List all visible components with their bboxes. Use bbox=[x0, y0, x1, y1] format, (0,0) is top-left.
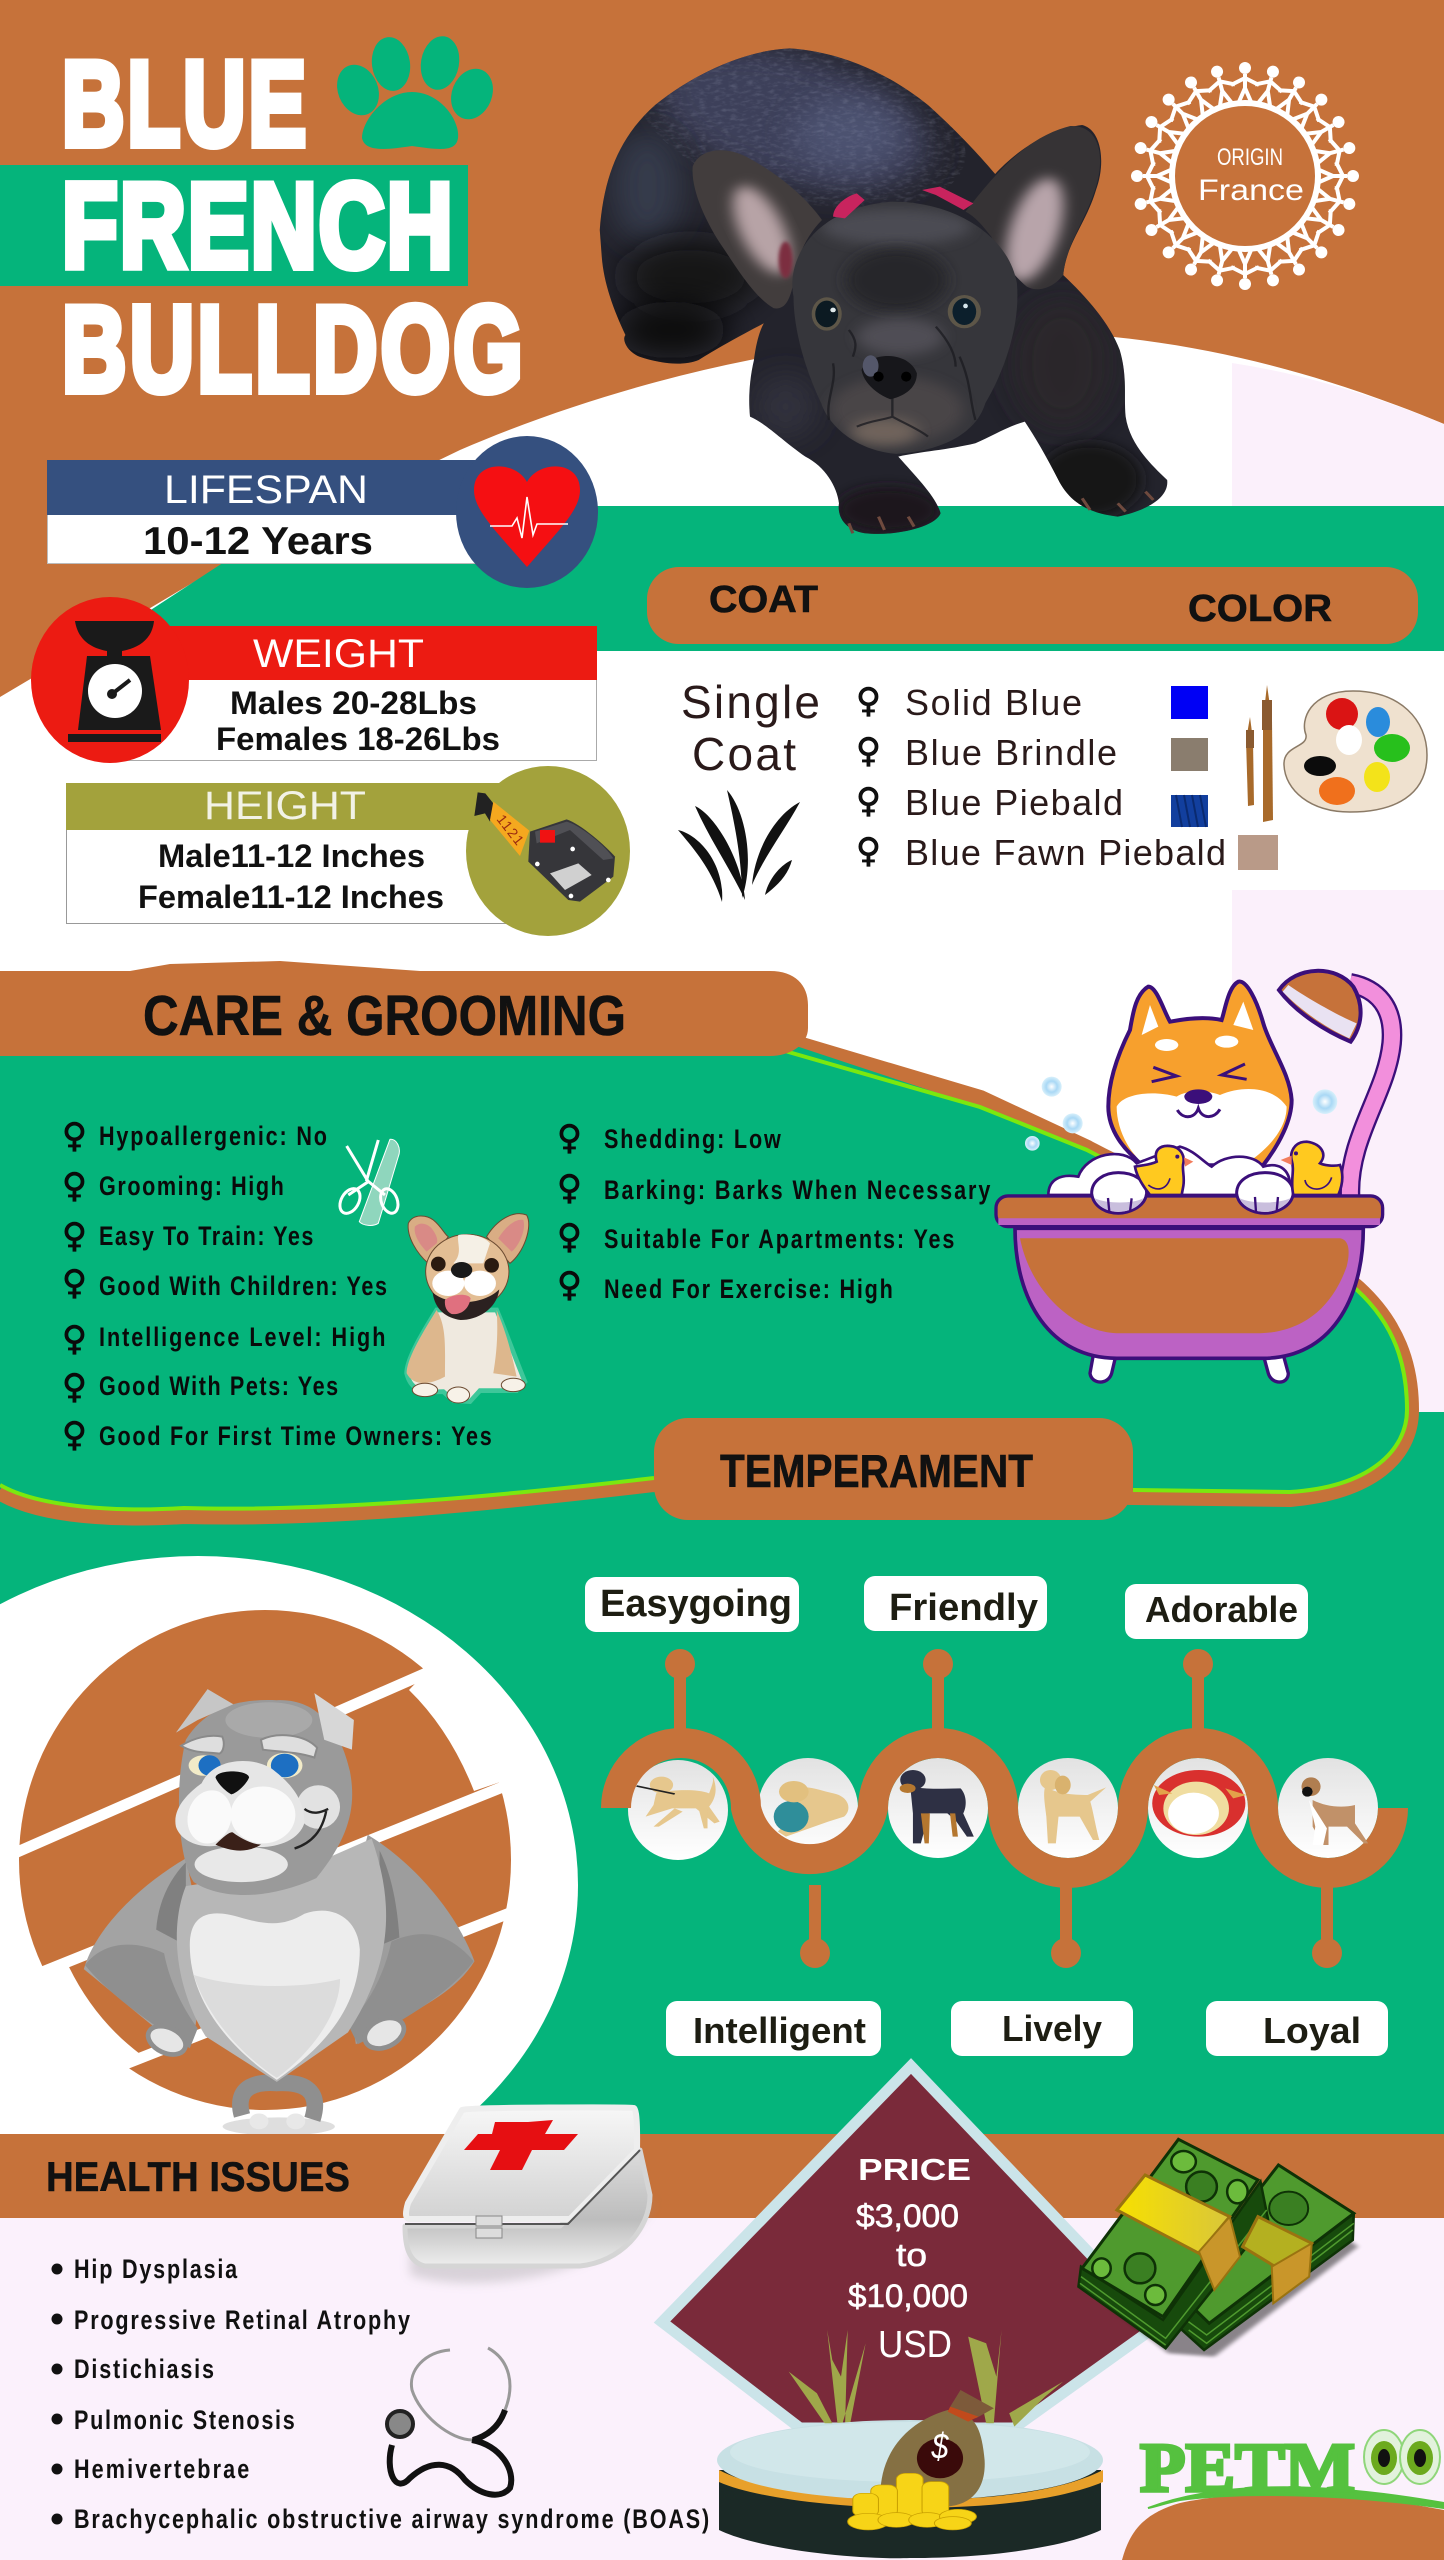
illustration: shiba in bathtub bbox=[996, 971, 1392, 1382]
icon: stethoscope bbox=[387, 2348, 511, 2495]
panel: height bbox=[66, 766, 630, 936]
tub body bbox=[1015, 1228, 1363, 1358]
smile bbox=[295, 1809, 328, 1849]
left arm bbox=[84, 1858, 206, 2048]
care section lime line bbox=[0, 1049, 1407, 1509]
row easy to train: Easy To Train: Yes bbox=[99, 1222, 313, 1252]
bottom pink panel bbox=[0, 2218, 1444, 2560]
background: pink hill column bbox=[1232, 363, 1444, 506]
weight males: Males 20-28Lbs bbox=[230, 685, 477, 721]
tag friendly bbox=[864, 1576, 1047, 1631]
platform bbox=[717, 2420, 1103, 2558]
shadow bbox=[223, 2117, 335, 2136]
tag lively bbox=[951, 2001, 1133, 2056]
row hypoallergenic bbox=[62, 1116, 327, 1156]
row good with children bbox=[62, 1263, 387, 1303]
heading: health issues: HEALTH ISSUES bbox=[46, 2153, 350, 2200]
single coat text bbox=[681, 676, 820, 780]
brows bbox=[181, 1735, 317, 1758]
copper corner bbox=[1122, 2494, 1444, 2560]
forehead shade bbox=[225, 1702, 312, 1738]
care list left bbox=[62, 1116, 492, 1455]
row barking: ♀ bbox=[557, 1168, 582, 1208]
eyes bbox=[189, 1753, 302, 1778]
dollar disc bbox=[917, 2438, 963, 2478]
price low: $3,000 bbox=[856, 2198, 959, 2234]
icon: grass coat bbox=[678, 790, 800, 902]
icon: stacks of cash bbox=[1078, 2139, 1358, 2357]
chin bbox=[195, 1847, 288, 1882]
weight header bbox=[120, 626, 597, 680]
logo: petmoo bbox=[1122, 2430, 1444, 2560]
height female: Female11-12 Inches bbox=[138, 879, 444, 915]
row intelligence: Intelligence Level: High bbox=[99, 1323, 385, 1353]
single coat text: Single bbox=[681, 676, 820, 728]
tag adorable bbox=[1125, 1584, 1308, 1639]
item hip dysplasia: Hip Dysplasia bbox=[74, 2255, 238, 2285]
temperament heading: TEMPERAMENT bbox=[720, 1445, 1033, 1497]
cheek smile patch bbox=[297, 1785, 340, 1829]
row good with pets: Good With Pets: Yes bbox=[99, 1372, 338, 1402]
thumb standing lab bbox=[1040, 1770, 1106, 1843]
row grooming: ♀ bbox=[62, 1166, 87, 1206]
dollar sign: $ bbox=[931, 2427, 950, 2467]
row exercise: Need For Exercise: High bbox=[604, 1275, 893, 1305]
row apartments bbox=[557, 1217, 954, 1257]
white thumbnail circles bbox=[628, 1758, 1378, 1860]
icon: kitchen scale bbox=[68, 621, 161, 742]
temperament heading box bbox=[654, 1418, 1133, 1520]
icon: first aid kit bbox=[405, 2107, 655, 2283]
swatch piebald bbox=[1171, 795, 1208, 827]
icon: scissors and comb bbox=[336, 1139, 401, 1225]
icon: paint palette bbox=[1246, 685, 1427, 822]
title group bbox=[0, 37, 523, 417]
icon: money bag and coins bbox=[848, 2390, 994, 2530]
wave bbox=[616, 1743, 1393, 1873]
reeds around price platform bbox=[789, 2330, 1063, 2427]
row: solid blue: Solid Blue bbox=[905, 682, 1082, 723]
row good with children: Good With Children: Yes bbox=[99, 1272, 387, 1302]
price diamond bbox=[662, 2066, 1158, 2428]
shower pipe bbox=[1350, 983, 1392, 1195]
green title bar bbox=[0, 165, 468, 286]
row good with children: ♀ bbox=[62, 1263, 87, 1303]
right arm bbox=[340, 1835, 474, 2044]
item pra: Progressive Retinal Atrophy bbox=[74, 2306, 410, 2336]
tag easygoing: Easygoing bbox=[600, 1583, 792, 1625]
tag loyal: Loyal bbox=[1263, 2010, 1361, 2051]
origin label: ORIGIN bbox=[1217, 144, 1283, 171]
tub rim bbox=[996, 1196, 1383, 1227]
icon: tape measure bbox=[474, 792, 615, 902]
thumb rottweiler bbox=[900, 1770, 974, 1843]
tag friendly: Friendly bbox=[889, 1587, 1038, 1629]
heading coat: COAT bbox=[709, 579, 818, 621]
row: blue piebald: ♀ bbox=[856, 781, 881, 821]
row: solid blue: ♀ bbox=[856, 681, 881, 721]
background: pink column lower bbox=[1232, 890, 1444, 1415]
snout bbox=[175, 1761, 304, 1847]
row first time owners: Good For First Time Owners: Yes bbox=[99, 1422, 492, 1452]
price to: to bbox=[896, 2237, 927, 2273]
temperament wave connector bbox=[616, 1649, 1393, 1968]
care section green blob bbox=[0, 1040, 1407, 1509]
icon: heart with pulse bbox=[474, 466, 580, 567]
health issues band bbox=[0, 2134, 1444, 2218]
price heading: PRICE bbox=[858, 2152, 971, 2187]
height header bbox=[66, 783, 516, 830]
lifespan badge bbox=[456, 436, 598, 588]
rear paws bbox=[249, 2113, 305, 2129]
lifespan box bbox=[48, 460, 480, 564]
health issues list bbox=[52, 2255, 709, 2535]
row good with pets bbox=[62, 1367, 338, 1407]
tag intelligent bbox=[666, 2001, 881, 2056]
row grooming bbox=[62, 1166, 284, 1206]
heading: care and grooming: CARE & GROOMING bbox=[143, 984, 626, 1048]
care list right bbox=[557, 1118, 991, 1305]
row intelligence bbox=[62, 1319, 385, 1359]
tub feet bbox=[1090, 1355, 1288, 1382]
tag loyal bbox=[1206, 2001, 1388, 2056]
background: green band bbox=[88, 506, 1444, 651]
tag lively: Lively bbox=[1002, 2008, 1102, 2049]
height badge bbox=[466, 766, 630, 936]
nodes and stems bottom bbox=[800, 1885, 1342, 1968]
eyes bbox=[1364, 2430, 1440, 2484]
tag adorable: Adorable bbox=[1145, 1589, 1298, 1630]
item pulmonic stenosis: Pulmonic Stenosis bbox=[74, 2406, 295, 2436]
care and grooming ribbon bbox=[0, 961, 808, 1056]
bag bbox=[880, 2410, 985, 2507]
rubber ducks bbox=[1135, 1142, 1342, 1195]
thumb dog in basket bbox=[1152, 1770, 1246, 1837]
striped copper circle bbox=[15, 1610, 530, 2110]
swatch fawn bbox=[1238, 835, 1278, 870]
title: BULLDOG: BULLDOG bbox=[62, 280, 523, 417]
belly shade bbox=[194, 1975, 340, 2078]
wordmark: PETM bbox=[1140, 2430, 1355, 2507]
tie bbox=[950, 2390, 994, 2418]
muzzle lobes bbox=[182, 1785, 295, 1848]
lime swoosh bbox=[1148, 2487, 1444, 2508]
row: blue piebald: Blue Piebald bbox=[905, 782, 1123, 823]
height male: Male11-12 Inches bbox=[158, 838, 425, 874]
row barking: Barking: Barks When Necessary bbox=[604, 1176, 991, 1206]
care section border copper bbox=[0, 1040, 1409, 1515]
row: blue brindle: ♀ bbox=[856, 731, 881, 771]
duck left bbox=[1135, 1146, 1193, 1195]
coat color list bbox=[856, 681, 1278, 873]
icon: tape measure: 1121 bbox=[494, 811, 528, 849]
shiba head bbox=[1108, 982, 1292, 1165]
row hypoallergenic: Hypoallergenic: No bbox=[99, 1122, 327, 1152]
row exercise: ♀ bbox=[557, 1265, 582, 1305]
bubbles bbox=[1025, 1077, 1337, 1151]
ears bbox=[176, 1689, 354, 1750]
heading color: COLOR bbox=[1188, 588, 1332, 630]
background: white hill bbox=[0, 333, 1444, 975]
lifespan header bbox=[47, 460, 479, 515]
row easy to train: ♀ bbox=[62, 1216, 87, 1256]
illustration: grey bulldog mascot bbox=[84, 1689, 474, 2136]
row grooming: Grooming: High bbox=[99, 1172, 284, 1202]
origin value: France bbox=[1198, 174, 1304, 207]
title: BLUE: BLUE bbox=[62, 37, 306, 171]
shower head bbox=[1279, 971, 1361, 1042]
row: blue fawn piebald: ♀ bbox=[856, 831, 881, 871]
weight heading: WEIGHT bbox=[253, 632, 424, 676]
row first time owners: ♀ bbox=[62, 1415, 87, 1455]
belly bbox=[190, 1911, 360, 2080]
price currency: USD bbox=[878, 2324, 952, 2366]
item hemivertebrae: Hemivertebrae bbox=[74, 2455, 249, 2485]
white circle backdrop bbox=[0, 1556, 578, 2214]
duck right bbox=[1281, 1142, 1342, 1195]
mouth bbox=[215, 1832, 261, 1851]
swatch brindle bbox=[1171, 738, 1208, 771]
thumbnails: six dogs bbox=[637, 1770, 1368, 1845]
row easy to train bbox=[62, 1216, 313, 1256]
front paws bbox=[144, 2012, 409, 2060]
head bbox=[179, 1700, 352, 1895]
icon: sitting french bulldog cartoon bbox=[407, 1214, 529, 1403]
single coat text: Coat bbox=[692, 728, 796, 780]
row barking bbox=[557, 1168, 991, 1208]
lifespan value: 10-12 Years bbox=[143, 520, 373, 563]
coat color bar bbox=[647, 567, 1418, 644]
foam bbox=[1048, 1147, 1290, 1195]
row: blue fawn piebald: Blue Fawn Piebald bbox=[905, 832, 1226, 873]
weight box bbox=[120, 626, 596, 760]
row intelligence: ♀ bbox=[62, 1319, 87, 1359]
row hypoallergenic: ♀ bbox=[62, 1116, 87, 1156]
item distichiasis: Distichiasis bbox=[74, 2355, 214, 2385]
background: copper header bbox=[0, 0, 1444, 720]
thumb boxer bbox=[1302, 1777, 1368, 1845]
row exercise bbox=[557, 1265, 893, 1305]
paws bbox=[1092, 1173, 1293, 1213]
swatch solid blue bbox=[1171, 686, 1208, 719]
thumb running dog bbox=[637, 1777, 720, 1828]
coin piles bbox=[848, 2473, 976, 2530]
tail ring bbox=[240, 2083, 315, 2119]
ring of people bbox=[1131, 62, 1359, 290]
background: lower green field bbox=[0, 1412, 1444, 2137]
thumb dog with ball bbox=[774, 1781, 848, 1837]
row apartments: Suitable For Apartments: Yes bbox=[604, 1225, 954, 1255]
nodes and stems top bbox=[665, 1649, 1213, 1730]
weight badge bbox=[31, 597, 189, 763]
height heading: HEIGHT bbox=[204, 784, 366, 828]
row shedding bbox=[557, 1118, 782, 1158]
row first time owners bbox=[62, 1415, 492, 1455]
price text bbox=[848, 2152, 971, 2366]
row: blue brindle: Blue Brindle bbox=[905, 732, 1117, 773]
row good with pets: ♀ bbox=[62, 1367, 87, 1407]
icon: paw bbox=[330, 33, 500, 149]
row shedding: Shedding: Low bbox=[604, 1125, 782, 1155]
price high: $10,000 bbox=[848, 2278, 968, 2314]
nose bbox=[215, 1771, 249, 1794]
torso bbox=[177, 1839, 386, 2082]
photo: blue french bulldog bbox=[600, 19, 1167, 534]
band bbox=[948, 2407, 978, 2422]
item boas: Brachycephalic obstructive airway syndrome (BOAS) bbox=[74, 2505, 709, 2535]
tag easygoing bbox=[585, 1577, 799, 1632]
height box bbox=[66, 784, 516, 924]
title: FRENCH: FRENCH bbox=[62, 159, 453, 293]
lifespan heading: LIFESPAN bbox=[164, 468, 368, 512]
panel: weight bbox=[31, 597, 597, 763]
origin badge bbox=[1131, 62, 1359, 290]
tag intelligent: Intelligent bbox=[693, 2010, 866, 2051]
panel: coat and color header bbox=[647, 567, 1418, 644]
panel: lifespan bbox=[47, 436, 598, 588]
weight females: Females 18-26Lbs bbox=[216, 721, 500, 757]
row shedding: ♀ bbox=[557, 1118, 582, 1158]
row apartments: ♀ bbox=[557, 1217, 582, 1257]
